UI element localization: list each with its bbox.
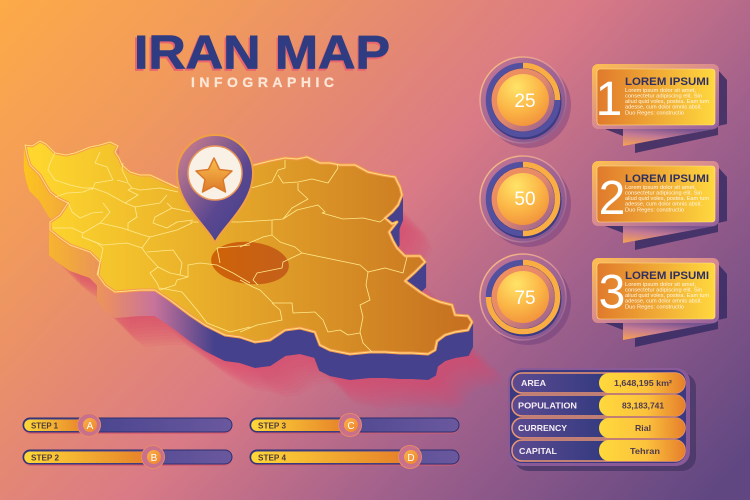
knob B: B: [151, 453, 158, 464]
body text: adesse, cum dolor omnis absit.: [625, 298, 702, 304]
step 1 slider: STEP 1: [31, 422, 59, 430]
step 4 slider: [250, 446, 459, 468]
progress arc: [488, 262, 558, 332]
knob A: [78, 414, 100, 436]
subtitle: INFOGRAPHIC: [191, 74, 334, 90]
body text: aliud quid voles, postea. Eam tum: [625, 99, 709, 105]
highlighted region: [209, 238, 291, 288]
body text: adesse, cum dolor omnis absit.: [625, 104, 702, 110]
body text: Duo Reges: constructio: [625, 304, 684, 310]
row: currency: CURRENCY: [518, 423, 567, 433]
body text: Lorem ipsum dolor sit amet,: [625, 282, 696, 288]
number: 2: [599, 172, 625, 225]
row: area: AREA: [521, 378, 546, 388]
row: area: 1,648,195 km²: [614, 378, 672, 388]
progress arc: [523, 164, 558, 234]
province borders: [48, 152, 407, 352]
body text: aliud quid voles, postea. Eam tum: [625, 293, 709, 299]
body text: [625, 282, 709, 310]
pin inner circle: [188, 146, 242, 200]
value: 75: [514, 288, 536, 309]
body text: Lorem ipsum dolor sit amet,: [625, 88, 696, 94]
knob D: [398, 446, 422, 468]
step 1 slider: [23, 414, 232, 436]
body text: Duo Reges: constructio: [625, 208, 684, 214]
knob B: [142, 446, 164, 468]
body text: Duo Reges: constructio: [625, 110, 684, 116]
step 2 slider: [23, 446, 232, 468]
gauge: 75: [480, 254, 571, 345]
gauge: 25: [480, 57, 571, 148]
title: IRAN MAP: [134, 26, 390, 78]
row: population: 83,183,741: [622, 400, 664, 410]
number: 1: [596, 73, 622, 126]
body text: consectetur adipiscing elit. Sin: [625, 94, 702, 100]
value: 25: [514, 91, 536, 112]
row: currency: Rial: [635, 423, 651, 433]
heading: LOREM IPSUMI: [625, 270, 709, 282]
number: 3: [599, 266, 625, 319]
map shadow: [28, 169, 502, 409]
body text: adesse, cum dolor omnis absit.: [625, 202, 702, 208]
map surface: [25, 141, 472, 354]
row: currency: [512, 418, 685, 438]
heading: LOREM IPSUMI: [625, 76, 709, 88]
value: 50: [514, 189, 536, 210]
step 3 slider: [250, 414, 459, 436]
map extrusion: [25, 142, 472, 379]
facts table: [508, 368, 696, 471]
card 3: [592, 258, 727, 347]
card 2: [592, 161, 727, 250]
title: IRAN MAP: [132, 28, 389, 80]
step 3 slider: STEP 3: [258, 422, 287, 430]
step 4 slider: STEP 4: [258, 454, 287, 462]
card 1: [592, 64, 727, 153]
row: capital: [512, 440, 685, 461]
knob C: [338, 414, 362, 436]
row: capital: CAPITAL: [519, 446, 557, 456]
knob C: C: [347, 421, 355, 432]
row: area: [512, 373, 685, 393]
body text: [625, 185, 709, 214]
progress arc: [523, 66, 558, 100]
body text: consectetur adipiscing elit. Sin: [625, 190, 702, 196]
heading: LOREM IPSUMI: [625, 173, 709, 185]
icon: star: [196, 158, 232, 192]
body text: [625, 88, 709, 116]
gauge: 50: [480, 156, 571, 247]
row: population: POPULATION: [518, 400, 577, 410]
body text: Lorem ipsum dolor sit amet,: [625, 185, 696, 191]
row: capital: Tehran: [630, 446, 660, 456]
knob D: D: [407, 453, 415, 464]
knob A: A: [87, 421, 94, 432]
body text: aliud quid voles, postea. Eam tum: [625, 196, 709, 202]
row: population: [512, 395, 685, 416]
location pin: [177, 135, 253, 243]
step 2 slider: STEP 2: [31, 454, 60, 462]
body text: consectetur adipiscing elit. Sin: [625, 288, 702, 294]
